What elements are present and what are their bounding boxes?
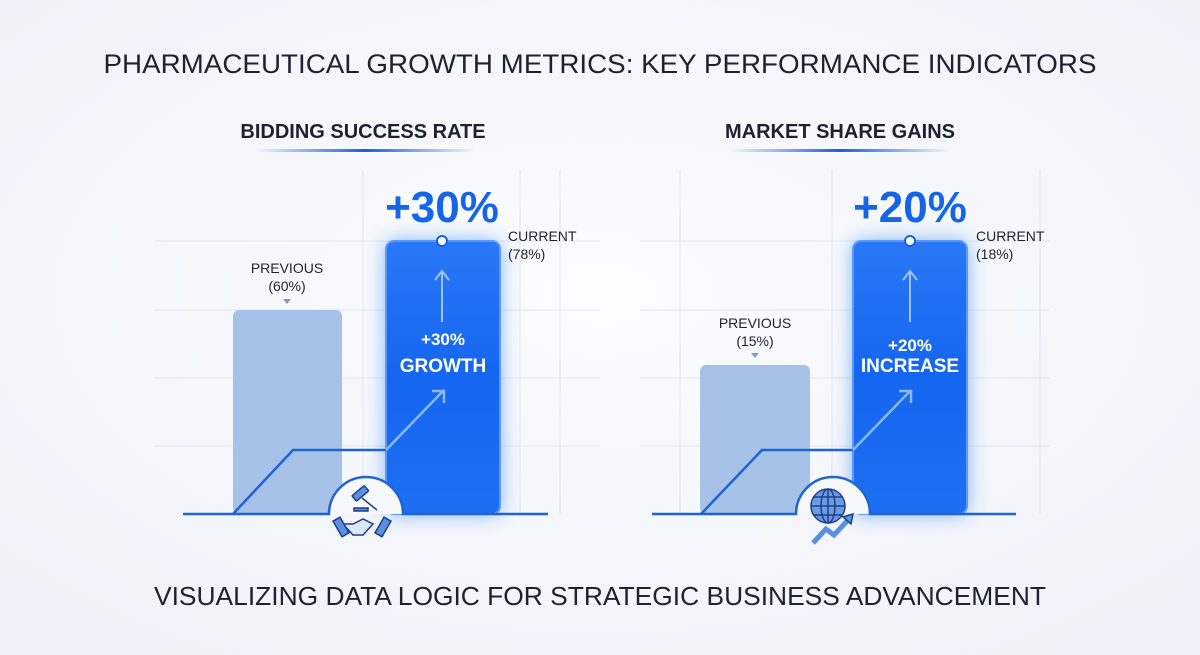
icon: gavel handshake <box>333 486 391 537</box>
heading: bidding success rate: BIDDING SUCCESS RATE <box>240 121 486 143</box>
baseline with bump <box>652 477 1016 514</box>
panel: market share gains <box>652 121 1045 543</box>
big value: +20% <box>853 183 967 232</box>
label: previous: (60%) <box>268 278 306 294</box>
bar: current: INCREASE <box>861 356 959 377</box>
bar: current <box>386 236 500 514</box>
icon: globe with arrow <box>811 489 853 543</box>
label: current: (18%) <box>976 246 1013 262</box>
panel: bidding success rate <box>183 121 577 537</box>
bar: current: GROWTH <box>400 356 486 377</box>
label: current: CURRENT <box>976 228 1045 244</box>
big value: +30% <box>385 183 499 232</box>
label: current <box>508 228 577 262</box>
footer subtitle: VISUALIZING DATA LOGIC FOR STRATEGIC BUSINESS ADVANCEMENT <box>154 581 1046 611</box>
label: previous: (15%) <box>736 333 774 349</box>
trend line <box>701 390 911 514</box>
bar: previous <box>700 365 810 514</box>
title: PHARMACEUTICAL GROWTH METRICS: KEY PERFORMANCE INDICATORS <box>104 49 1096 79</box>
label: current: CURRENT <box>508 228 577 244</box>
heading: market share gains: MARKET SHARE GAINS <box>725 121 955 143</box>
label: current: (78%) <box>508 246 545 262</box>
label: previous: PREVIOUS <box>251 260 323 276</box>
trend line <box>233 390 444 514</box>
label: previous <box>719 315 791 358</box>
label: previous: PREVIOUS <box>719 315 791 331</box>
bar: current: +20% <box>888 336 932 355</box>
label: current <box>976 228 1045 262</box>
bar: current <box>853 236 967 514</box>
label: previous <box>251 260 323 304</box>
bar: current: +30% <box>421 330 465 349</box>
baseline with bump <box>183 477 548 514</box>
bar: previous <box>233 310 342 514</box>
